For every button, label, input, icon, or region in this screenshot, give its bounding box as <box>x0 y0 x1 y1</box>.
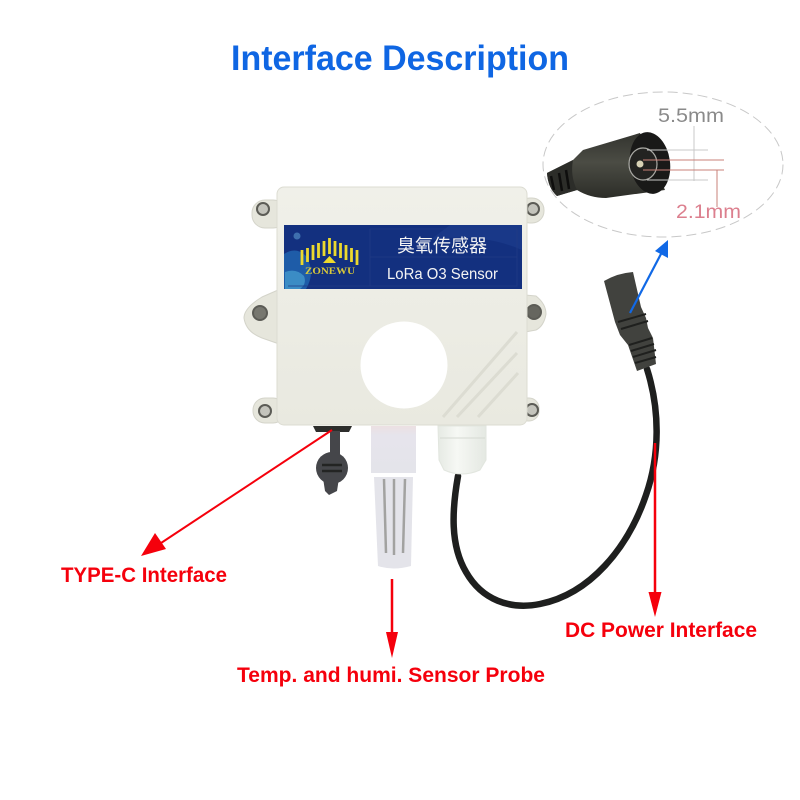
title: Interface Description <box>231 39 569 78</box>
arrow: to TYPE-C interface <box>141 430 332 556</box>
enclosure body <box>277 187 527 425</box>
dashed ellipse outline <box>543 92 783 237</box>
icon: cable gland <box>438 426 486 474</box>
sensor opening <box>360 322 448 408</box>
logo: ZONEWU <box>302 238 357 276</box>
product name Chinese: 臭氧传感器 <box>397 236 487 256</box>
arrow: to DC power label <box>648 443 662 617</box>
label: 5.5mm dimension: 5.5mm <box>658 106 724 127</box>
icon: DC power plug <box>604 272 656 371</box>
panel: sensor enclosure <box>244 187 546 425</box>
screws <box>253 203 541 417</box>
product name English: LoRa O3 Sensor <box>387 266 498 283</box>
label: 2.1mm dimension: 2.1mm <box>676 202 741 223</box>
label: DC Power Interface: DC Power Interface <box>565 619 757 642</box>
mounting ears <box>244 198 546 423</box>
logo: ZONEWU: ZONEWU <box>305 266 356 276</box>
label: TYPE-C Interface: TYPE-C Interface <box>61 564 227 587</box>
panel: DC connector detail callout <box>543 92 783 237</box>
icon: DC cable <box>454 369 657 606</box>
label: 2.1mm dimension <box>643 160 741 223</box>
icon: TYPE-C port and cap <box>313 426 352 495</box>
label plate <box>284 225 522 289</box>
label: Temp. and humi. Sensor Probe: Temp. and humi. Sensor Probe <box>237 664 545 687</box>
icon: temperature and humidity probe <box>371 426 416 568</box>
arrow: plug to detail callout <box>630 240 668 313</box>
label: 5.5mm dimension <box>647 106 724 181</box>
diagonal ribs <box>443 332 518 417</box>
icon: DC plug close-up <box>547 130 674 198</box>
arrow: to probe label <box>386 579 398 658</box>
